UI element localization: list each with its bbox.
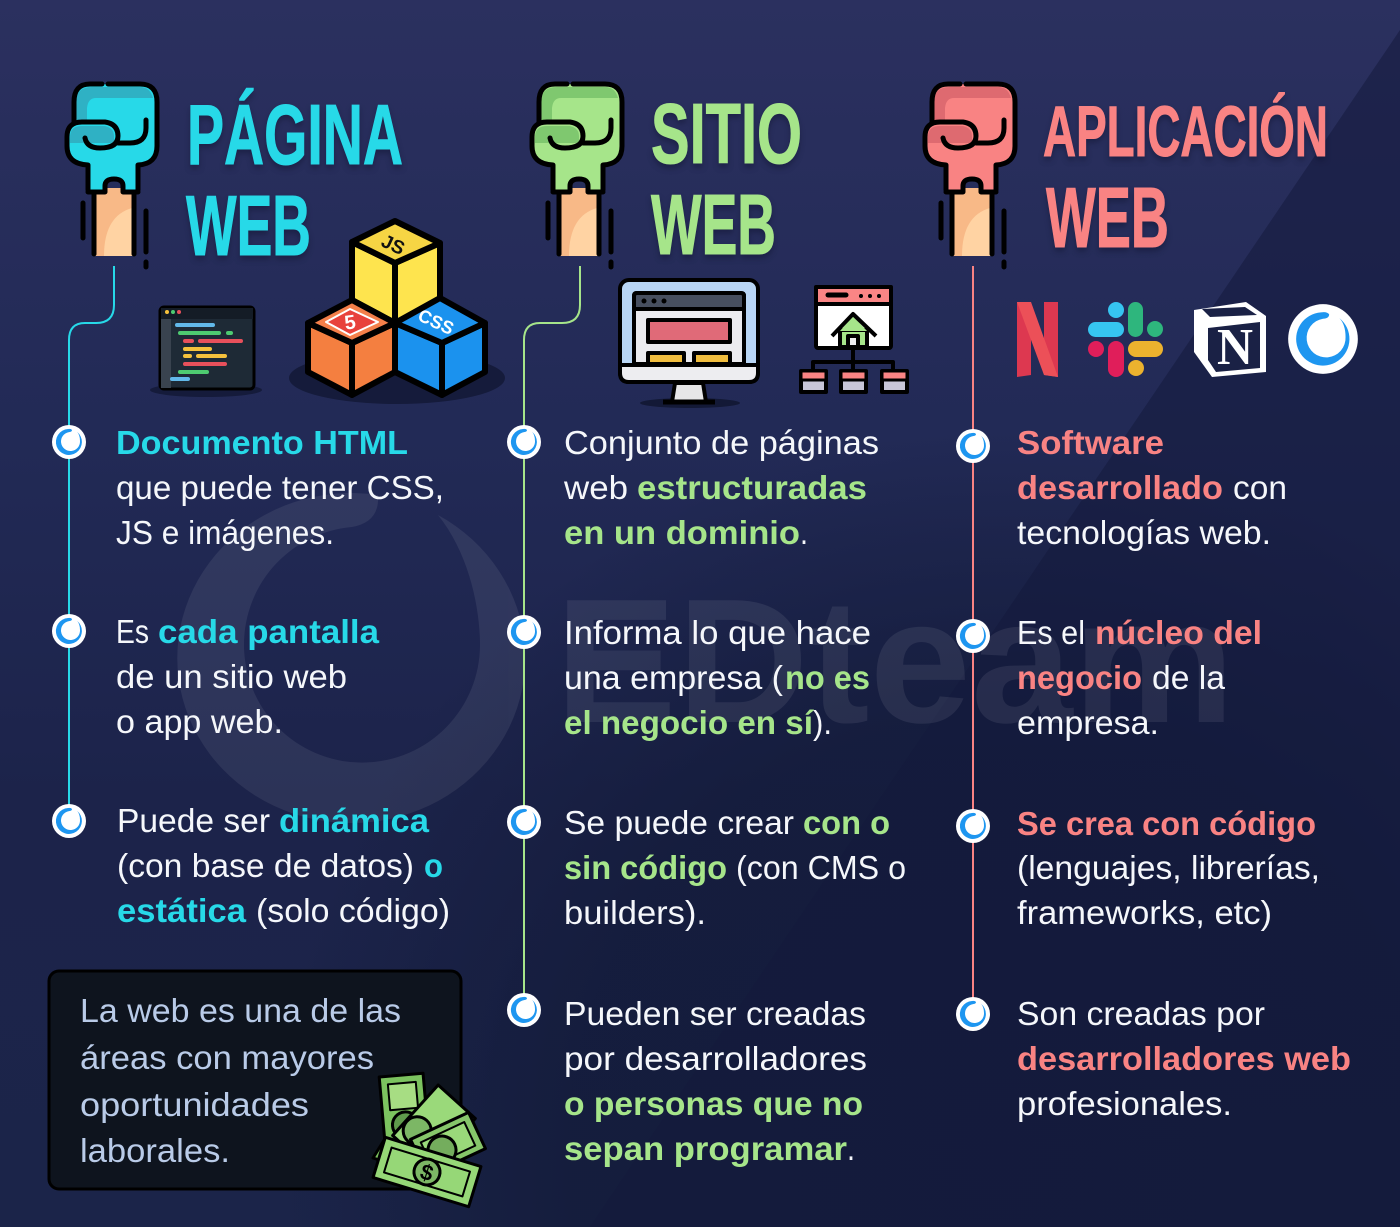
text: núcleo del negocio [1017, 614, 1262, 741]
text: documento html: Documento HTML [116, 424, 408, 461]
heading: página web: WEB [186, 179, 311, 274]
icon: money bills: $ [417, 1159, 436, 1186]
heading: sitio web: SITIO [651, 87, 802, 182]
icon: code window [150, 307, 262, 397]
text: dinámica o estática: (solo código) [256, 892, 450, 929]
watermark logo [177, 493, 1235, 823]
text: dinámica o estática [117, 802, 450, 929]
icon: rocket fist [532, 84, 622, 267]
text: informa lo que hace [564, 614, 871, 741]
text: con o sin código: Se puede crear [564, 804, 794, 841]
text: cada pantalla: cada pantalla [158, 613, 380, 650]
column: aplicación web [925, 84, 1358, 1122]
bullet markers [507, 425, 541, 1027]
text: núcleo del negocio: núcleo del [1095, 614, 1262, 651]
text: conjunto de páginas: Conjunto de páginas [564, 424, 879, 461]
heading: sitio web: WEB [651, 178, 776, 273]
icon: code cubes: JS [378, 231, 408, 260]
text: informa lo que hace: ). [813, 704, 832, 741]
text: documento html: que puede tener CSS, [116, 469, 444, 506]
icon: code cubes: CSS [415, 305, 457, 339]
logo: slack [1088, 302, 1163, 377]
logo: edteam [1288, 304, 1358, 374]
column: sitio web [507, 84, 907, 1167]
heading: aplicación web [1043, 93, 1328, 266]
text: se crea con código: (lenguajes, librerías, [1017, 849, 1320, 886]
text: se crea con código: frameworks, etc) [1017, 894, 1272, 931]
text: conjunto de páginas: estructuradas [637, 469, 867, 506]
text: software desarrollado: tecnologías web. [1017, 514, 1271, 551]
text: informa lo que hace: no es [785, 659, 870, 696]
text: informa lo que hace: el negocio en sí [564, 704, 815, 741]
text: núcleo del negocio: de la [1152, 659, 1226, 696]
text: se crea con código: Se crea con código [1017, 805, 1316, 842]
text: desarrolladores web [1017, 995, 1351, 1122]
text: cada pantalla: Es [116, 613, 149, 650]
text: creadas por desarrolladores: . [847, 1130, 855, 1167]
bullet markers [956, 429, 990, 1031]
icon: code cubes: 5 [343, 311, 357, 335]
text: dinámica o estática: dinámica [279, 802, 430, 839]
bullet markers [52, 425, 86, 838]
text: creadas por desarrolladores: por desarrolladores [564, 1040, 867, 1077]
callout: oportunidades laborales: laborales. [80, 1132, 230, 1169]
icon: money bills [373, 1073, 485, 1207]
text: desarrolladores web: desarrolladores web [1017, 1040, 1351, 1077]
text: documento html: JS e imágenes. [116, 514, 334, 551]
text: dinámica o estática: Puede ser [117, 802, 270, 839]
column: página web [49, 84, 505, 1207]
text: dinámica o estática: (con base de datos) [117, 847, 414, 884]
icon: rocket fist [67, 84, 157, 267]
text: conjunto de páginas: en un dominio [564, 514, 800, 551]
text: núcleo del negocio: Es el [1017, 614, 1085, 651]
text: desarrolladores web: profesionales. [1017, 1085, 1232, 1122]
text: con o sin código: (con CMS o [736, 849, 906, 886]
text: cada pantalla [116, 613, 380, 740]
callout: oportunidades laborales: La web es una de las [80, 992, 401, 1029]
callout: oportunidades laborales: áreas con mayores [80, 1039, 374, 1076]
text: conjunto de páginas: . [800, 514, 808, 551]
watermark logo: EDteam [555, 562, 1235, 760]
text: conjunto de páginas: web [563, 469, 628, 506]
text: núcleo del negocio: negocio [1017, 659, 1142, 696]
text: cada pantalla: de un sitio web [116, 658, 347, 695]
text: dinámica o estática: o [424, 847, 443, 884]
text: software desarrollado: desarrollado [1017, 469, 1223, 506]
text: desarrolladores web: Son creadas por [1017, 995, 1265, 1032]
text: con o sin código: sin código [564, 849, 727, 886]
text: con o sin código: builders). [564, 894, 706, 931]
heading: página web: PÁGINA [187, 88, 403, 183]
timeline [972, 266, 974, 1014]
heading: página web [186, 88, 403, 274]
logo: netflix [1017, 302, 1058, 377]
text: software desarrollado: con [1233, 469, 1287, 506]
icon: code cubes [289, 221, 505, 404]
heading: aplicación web: WEB [1046, 171, 1169, 266]
heading: sitio web [651, 87, 802, 273]
timeline [69, 266, 114, 822]
timeline [524, 266, 580, 1010]
text: informa lo que hace: Informa lo que hace [564, 614, 871, 651]
text: creadas por desarrolladores: Pueden ser creadas [564, 995, 866, 1032]
text: creadas por desarrolladores [564, 995, 867, 1167]
text: software desarrollado: Software [1017, 424, 1164, 461]
icon: site map [801, 287, 907, 392]
text: creadas por desarrolladores: o personas que no [564, 1085, 863, 1122]
text: conjunto de páginas [563, 424, 879, 551]
text: cada pantalla: o app web. [116, 703, 283, 740]
text: con o sin código: con o [803, 804, 890, 841]
icon: rocket fist [925, 84, 1015, 267]
text: se crea con código [1017, 805, 1320, 931]
text: dinámica o estática: estática [117, 892, 247, 929]
logo: notion [1194, 302, 1266, 377]
text: documento html [116, 424, 444, 551]
callout: oportunidades laborales: oportunidades [80, 1086, 309, 1123]
logo: notion: N [1217, 319, 1253, 376]
text: creadas por desarrolladores: sepan programar [564, 1130, 847, 1167]
text: con o sin código [564, 804, 906, 931]
icon: desktop monitor [620, 280, 758, 408]
text: software desarrollado [1017, 424, 1287, 551]
text: informa lo que hace: una empresa ( [564, 659, 783, 696]
callout: oportunidades laborales [49, 971, 485, 1207]
text: núcleo del negocio: empresa. [1017, 704, 1159, 741]
